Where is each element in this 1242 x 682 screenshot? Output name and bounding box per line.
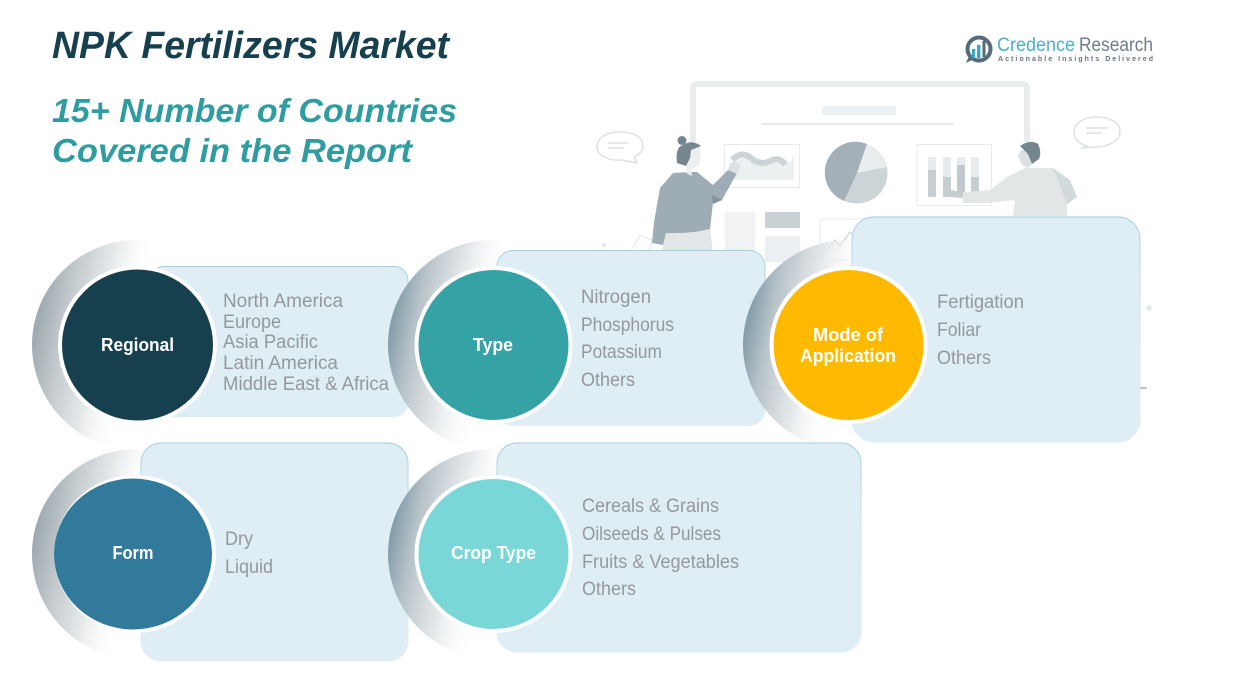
logo: Credence Research: Research xyxy=(1079,35,1153,56)
subtitle: 15+ Number of Countries xyxy=(52,92,457,129)
halo: regional xyxy=(32,240,242,450)
hair xyxy=(1020,142,1040,164)
segment: Form xyxy=(32,443,408,661)
hair xyxy=(677,142,701,166)
list: crops: Fruits & Vegetables xyxy=(582,552,739,573)
bar chart xyxy=(917,144,992,206)
hand xyxy=(728,162,741,174)
pie chart xyxy=(825,142,888,204)
label: Crop Type: Crop Type xyxy=(451,543,536,563)
list: regions: Latin America xyxy=(223,353,338,374)
icon: application circle xyxy=(772,268,926,422)
label: Form: Form xyxy=(112,543,154,563)
list: types: Phosphorus xyxy=(581,315,674,336)
monitor frame xyxy=(693,84,1027,142)
subtitle: Covered in the Report xyxy=(52,132,414,169)
list: types: Others xyxy=(581,370,635,391)
label: Mode of Application xyxy=(800,325,896,366)
body xyxy=(963,168,1067,216)
list: forms xyxy=(225,529,273,578)
list: types xyxy=(581,287,674,391)
icon: regional circle xyxy=(60,268,215,422)
label: Mode of Application: Application xyxy=(800,346,896,366)
segment: Type xyxy=(388,240,765,450)
title: NPK Fertilizers Market xyxy=(52,25,450,67)
list: crops xyxy=(582,496,739,600)
halo: type xyxy=(388,240,598,450)
sweater xyxy=(652,170,737,245)
list: types: Potassium xyxy=(581,342,662,363)
list: modes: Foliar xyxy=(937,320,982,341)
list: regions xyxy=(223,291,389,395)
panel: form items xyxy=(141,443,408,661)
logo: Credence Research xyxy=(966,35,1153,63)
speech bubbles xyxy=(597,117,1120,163)
list: regions: Middle East & Africa xyxy=(223,374,389,395)
list: types: Nitrogen xyxy=(581,287,651,308)
panel: application items xyxy=(852,217,1140,442)
trousers xyxy=(662,229,713,252)
segment: Crop Type xyxy=(388,443,861,659)
icon: form circle xyxy=(54,475,216,633)
logo: Credence Research: Actionable Insights Delivered xyxy=(998,56,1153,63)
area chart xyxy=(724,144,800,188)
list: modes: Others xyxy=(937,348,991,369)
list: modes: Fertigation xyxy=(937,292,1024,313)
label: Mode of Application: Mode of xyxy=(813,325,884,345)
hand xyxy=(950,190,963,198)
halo: application xyxy=(743,240,953,450)
icon: type circle xyxy=(416,268,570,422)
list: modes xyxy=(937,292,1024,369)
illustration: presenters at a dashboard xyxy=(597,84,1152,388)
list: regions: North America xyxy=(223,291,343,312)
small tiles xyxy=(725,212,755,262)
halo: form xyxy=(32,449,242,659)
icon: crop circle xyxy=(416,477,570,631)
woman presenter xyxy=(633,136,741,262)
face xyxy=(1018,150,1036,168)
label: Type: Type xyxy=(473,335,513,355)
paper in hand xyxy=(633,235,652,262)
list: crops: Others xyxy=(582,579,636,600)
panel: type items xyxy=(497,250,765,426)
list: forms: Dry xyxy=(225,529,253,550)
list: crops: Cereals & Grains xyxy=(582,496,719,517)
panel: crop items xyxy=(497,443,861,652)
list: crops: Oilseeds & Pulses xyxy=(582,524,721,545)
segment: Mode of Application xyxy=(743,217,1140,450)
man presenter xyxy=(950,142,1077,216)
face xyxy=(686,146,701,176)
list: regions: Europe xyxy=(223,312,281,333)
label: Regional: Regional xyxy=(101,335,174,355)
line chart tile xyxy=(820,219,870,260)
subtitle xyxy=(52,92,457,169)
segment: Regional xyxy=(32,240,408,450)
halo: crop xyxy=(388,449,598,659)
list: regions: Asia Pacific xyxy=(223,332,318,353)
panel: regional items xyxy=(150,266,408,416)
logo: Credence Research: Credence xyxy=(997,35,1075,56)
list: forms: Liquid xyxy=(225,557,273,578)
stray decorations xyxy=(602,242,606,248)
